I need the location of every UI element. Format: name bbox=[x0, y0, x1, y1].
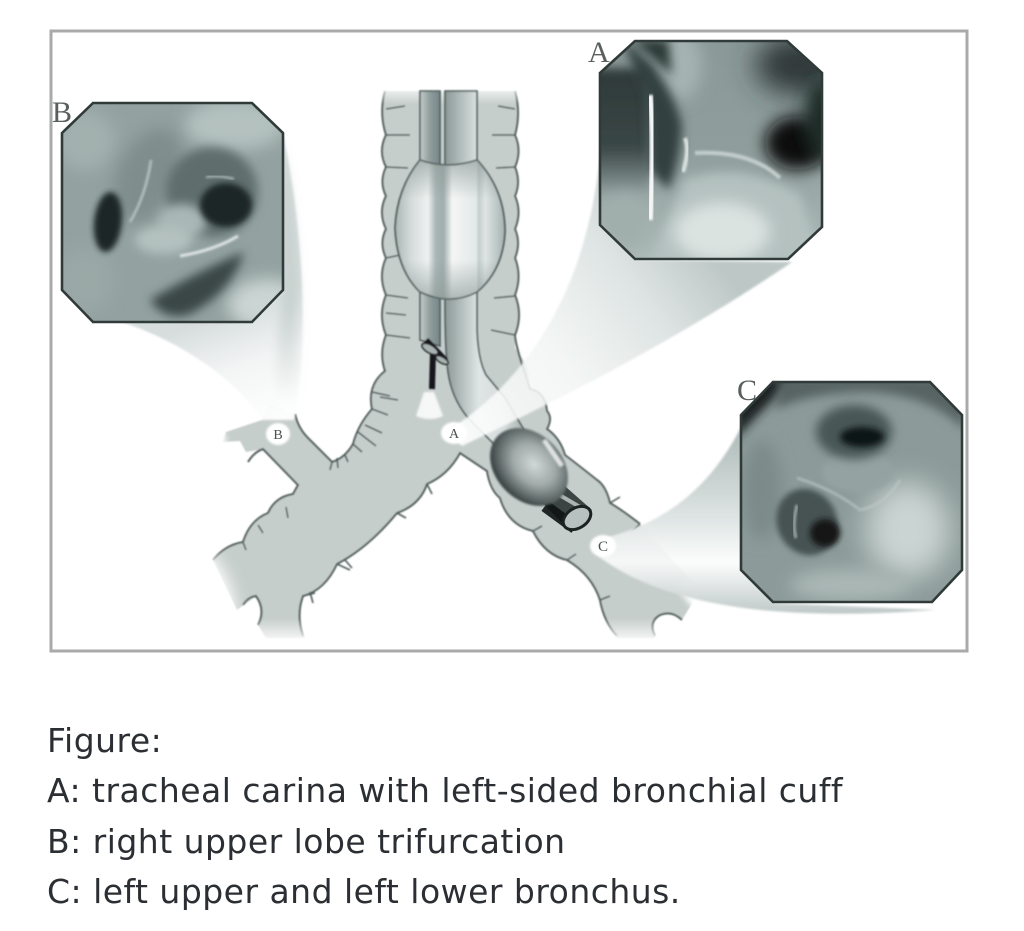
tracheal cuff bbox=[395, 160, 505, 299]
fibre scope bbox=[426, 340, 446, 389]
caption text block: C: left upper and left lower bronchus. bbox=[47, 872, 681, 911]
caption text block: A: tracheal carina with left-sided bronchial cuff bbox=[47, 771, 843, 810]
panel letter A: A bbox=[588, 36, 610, 69]
location label B bbox=[266, 423, 290, 445]
right lumen bbox=[445, 91, 530, 460]
panel letter C: C bbox=[737, 374, 757, 407]
airway: trachea and main bronchi bbox=[213, 91, 700, 638]
panel A: tracheal carina photo bbox=[598, 40, 824, 260]
panel B: right upper lobe photo bbox=[60, 102, 284, 324]
caption text block bbox=[47, 721, 844, 911]
caption text block: Figure: bbox=[47, 721, 162, 760]
light beam to panel A bbox=[446, 145, 792, 446]
location label C: C bbox=[598, 539, 608, 555]
panel C: left upper and lower bronchus photo bbox=[735, 376, 967, 608]
light beam to panel B bbox=[122, 133, 303, 420]
illustration: bronchoscopic figure bbox=[50, 30, 968, 652]
light beam to panel C bbox=[595, 425, 936, 614]
location label A: A bbox=[449, 427, 460, 442]
fade at airway ends bbox=[180, 84, 722, 644]
scope light bbox=[416, 392, 443, 419]
figure frame bbox=[51, 31, 967, 651]
panel letter B: B bbox=[52, 96, 72, 129]
endotracheal tube bbox=[395, 91, 530, 460]
location label C bbox=[590, 535, 616, 557]
caption text block: B: right upper lobe trifurcation bbox=[47, 822, 566, 861]
location label A bbox=[441, 422, 467, 444]
bronchial cuff and tube tip bbox=[475, 413, 595, 534]
location label B: B bbox=[273, 428, 283, 443]
left lumen bbox=[420, 91, 440, 346]
cartilage ticks bbox=[243, 106, 640, 603]
